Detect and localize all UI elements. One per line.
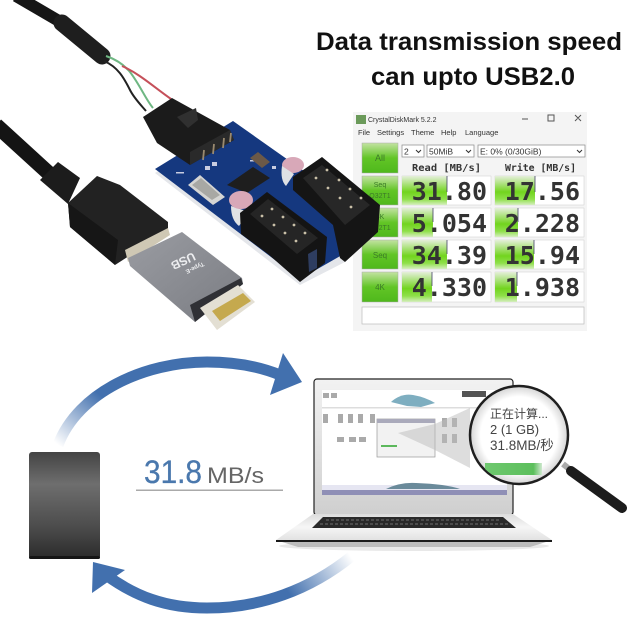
window title: CrystalDiskMark 5.2.2: [368, 117, 437, 124]
keyboard: [312, 517, 516, 528]
laptop base: [276, 514, 552, 540]
transfer speed label: 31.8: [144, 454, 202, 490]
board: blue PCB: [155, 121, 345, 285]
transfer speed label: [136, 454, 283, 491]
test buttons: [362, 143, 398, 302]
copy dialog: [377, 419, 435, 457]
lens content: 2 (1 GB): [490, 422, 539, 437]
connector: lower pin header: [240, 192, 327, 282]
window controls: [522, 115, 581, 121]
result values: 5.054: [412, 209, 487, 238]
lens content: [485, 406, 554, 475]
menu bar: [358, 128, 498, 137]
icon: magnifying glass: [470, 386, 622, 508]
selectors: 50MiB: [429, 146, 453, 156]
lens content: 31.8MB/秒: [490, 438, 554, 453]
title: can upto USB2.0: [371, 63, 575, 91]
adapter: grey USB Type-E housing: Type-E: [184, 260, 205, 274]
laptop lid: [314, 379, 513, 515]
panel: CrystalDiskMark benchmark window: [353, 112, 587, 331]
result cells: [402, 176, 584, 302]
photo: USB cables and adapter board: [0, 0, 380, 330]
menu bar: Language: [465, 128, 498, 137]
test buttons: All: [375, 153, 385, 163]
selectors: E: 0% (0/30GiB): [480, 146, 542, 156]
cable: USB cable with black plug: [0, 125, 170, 265]
column headers: Read [MB/s]: [412, 163, 481, 174]
result values: 15.94: [505, 241, 580, 270]
test buttons: Seq: [373, 251, 387, 260]
result values: 31.80: [412, 177, 487, 206]
result values: 17.56: [505, 177, 580, 206]
menu bar: Help: [441, 128, 456, 137]
comment box: [362, 307, 584, 324]
result values: 4.330: [412, 273, 487, 302]
connector: upper pin header: [293, 157, 380, 262]
magnifier handle: [563, 464, 573, 472]
transfer speed label: MB/s: [207, 463, 264, 488]
menu bar: Settings: [377, 128, 404, 137]
label: Type-E USB: USB: [168, 249, 198, 273]
result values: 2.228: [505, 209, 580, 238]
test buttons: Q32T1: [369, 225, 391, 232]
connector: black 2.54mm plug: [143, 98, 234, 165]
menu bar: Theme: [411, 128, 434, 137]
title: Data transmission speed: [316, 28, 622, 56]
lens: [470, 386, 568, 484]
icon: external hard drive: [29, 452, 100, 559]
title: [316, 28, 622, 91]
column headers: Write [MB/s]: [505, 162, 576, 174]
menu bar: File: [358, 128, 370, 137]
cable: internal header cable: [16, 0, 171, 111]
arrow: disk to laptop: [58, 353, 302, 445]
test buttons: 4K: [376, 214, 385, 221]
result values: 34.39: [412, 241, 487, 270]
test buttons: Seq: [374, 182, 386, 189]
selectors: 2: [404, 146, 409, 156]
selectors: [402, 145, 585, 157]
adapter: grey USB Type-E housing: [128, 232, 255, 330]
arrow: laptop to disk: [92, 556, 352, 608]
lens content: 正在计算...: [490, 406, 548, 421]
laptop: [276, 379, 552, 551]
column headers: [412, 162, 576, 174]
test buttons: Q32T1: [369, 193, 391, 200]
result values: 1.938: [505, 273, 580, 302]
screen content: [322, 390, 507, 495]
test buttons: 4K: [375, 283, 386, 292]
result values: [412, 177, 580, 302]
